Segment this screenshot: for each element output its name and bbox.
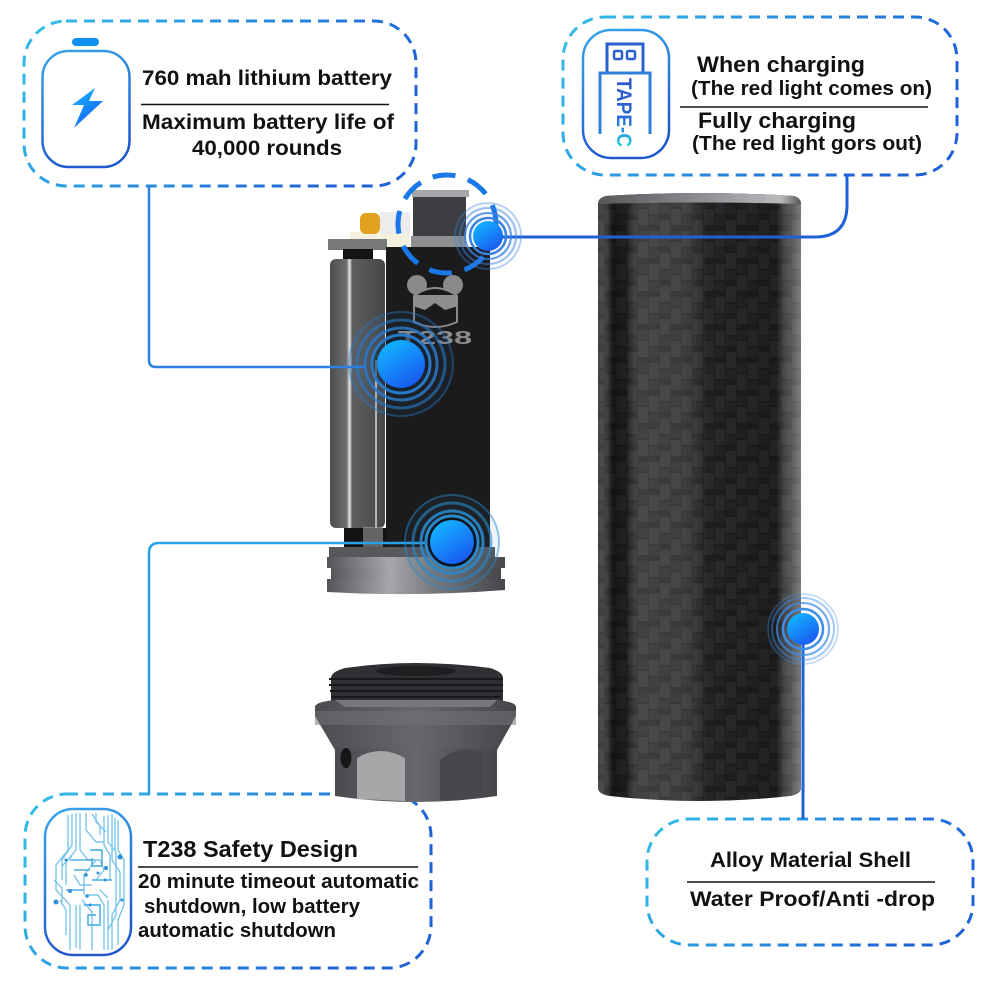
- text: low battery: shutdown, low battery: [144, 896, 361, 918]
- device core: [327, 190, 505, 594]
- icon: type-c plug: TAPE-C: [612, 78, 635, 147]
- panel: shell callout: [647, 819, 973, 945]
- heading: alloy shell: Alloy Material Shell: [710, 849, 911, 872]
- icon: battery: [42, 38, 130, 167]
- text: automatic shutdown: automatic shutdown: [138, 920, 336, 942]
- heading: safety design: T238 Safety Design: [143, 836, 358, 862]
- connector: charging: [495, 174, 847, 237]
- dashed circle: usb highlight: [398, 175, 496, 273]
- heading: battery capacity: 760 mah lithium battery: [142, 67, 392, 90]
- text: timeout: 20 minute timeout automatic: [138, 871, 419, 893]
- text: water proof: Water Proof/Anti -drop: [690, 888, 935, 911]
- icon: type-c plug: [583, 30, 669, 158]
- LED and contacts: [350, 232, 410, 247]
- threaded nut: [315, 663, 516, 802]
- text: battery life: Maximum battery life of: [142, 111, 395, 134]
- connector: battery: [149, 186, 366, 367]
- marker: safety: [405, 495, 499, 589]
- circuit board: [386, 247, 490, 548]
- marker: shell: [768, 594, 838, 664]
- text: red light on: (The red light comes on): [691, 78, 932, 100]
- heading: fully charging: Fully charging: [698, 108, 856, 133]
- carbon fibre shell: [598, 193, 801, 801]
- usb port: [411, 190, 469, 247]
- logo: bear mascot: [407, 275, 463, 327]
- base flange: [327, 547, 505, 594]
- logo: T238: T238: [398, 328, 472, 348]
- panel: charging callout: [563, 17, 957, 175]
- panel: battery callout: [24, 21, 416, 186]
- marker: usb port: [455, 203, 521, 269]
- marker: battery: [349, 312, 453, 416]
- text: battery rounds: 40,000 rounds: [192, 137, 342, 160]
- connector: safety: [149, 543, 425, 794]
- battery cell: [330, 259, 385, 528]
- text: red light off: (The red light gors out): [692, 133, 922, 155]
- panel: safety callout: [25, 794, 431, 968]
- connector: shell: [802, 640, 804, 819]
- icon: circuit board: [45, 809, 131, 955]
- heading: when charging: When charging: [697, 52, 865, 77]
